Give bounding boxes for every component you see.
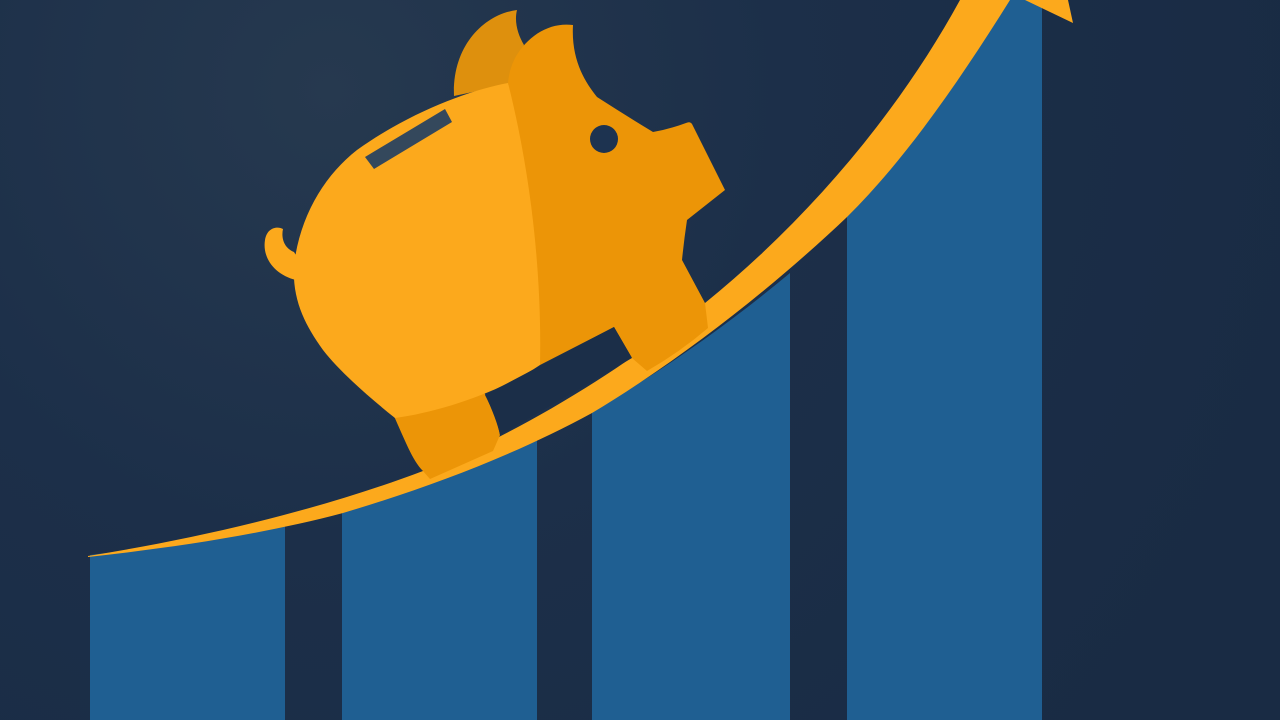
- belly band: [485, 327, 632, 435]
- body: [294, 83, 540, 418]
- bar 1: [90, 525, 285, 720]
- arrow head: [1025, 0, 1073, 23]
- rear leg: [393, 392, 500, 479]
- bar 2: [342, 439, 537, 720]
- arrow curve: [88, 0, 1010, 557]
- far ear: [454, 10, 524, 96]
- coin slot: [365, 109, 452, 169]
- bar 3: [592, 273, 790, 720]
- eye: [590, 125, 618, 153]
- growth arrow: [88, 0, 1073, 557]
- bar 4: [847, 0, 1042, 720]
- piggy bank: [265, 10, 725, 479]
- tail: [265, 228, 300, 280]
- bar chart: [90, 0, 1042, 720]
- head and front leg: [508, 25, 725, 371]
